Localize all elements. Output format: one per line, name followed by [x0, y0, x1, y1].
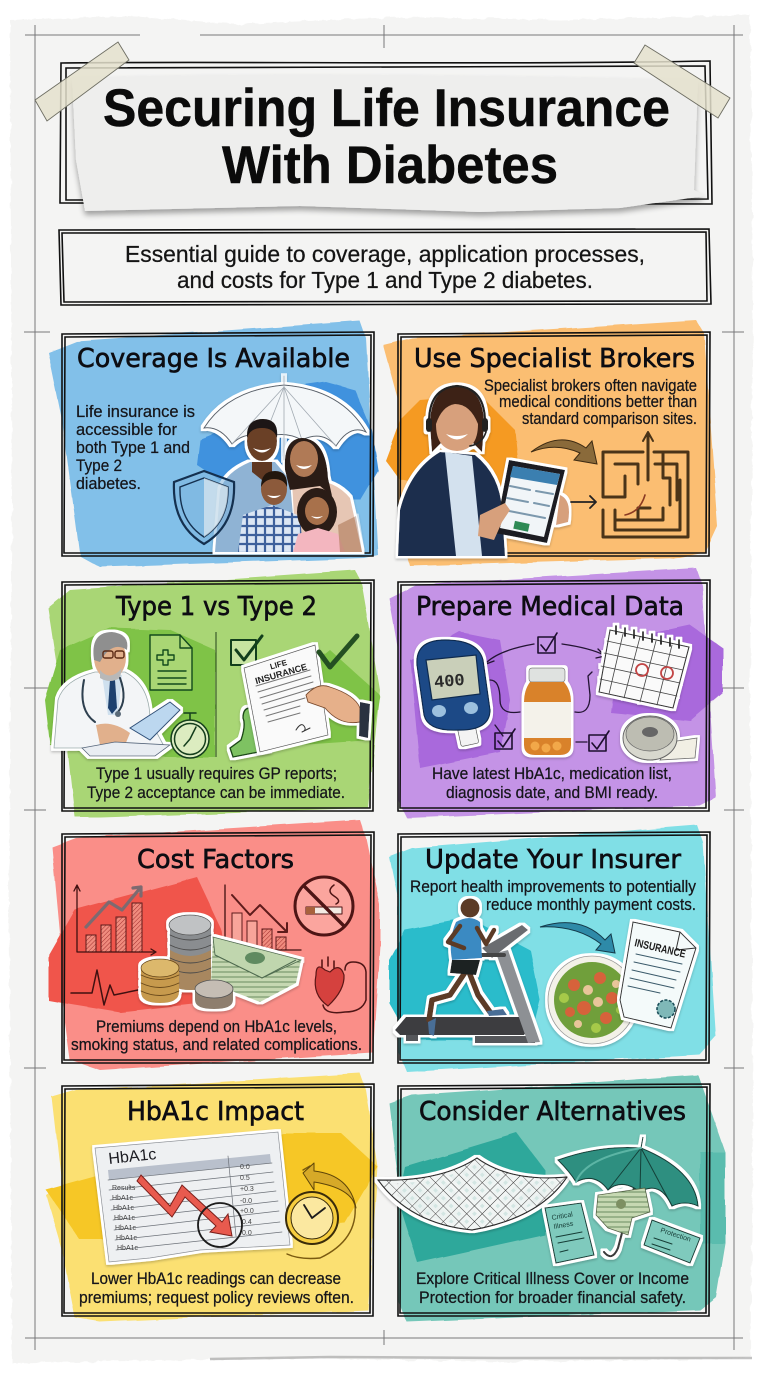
illustration: HbA1c table with falling arrow: Results [112, 1185, 136, 1192]
heading: Update Your Insurer [425, 845, 681, 875]
illustration: HbA1c table with falling arrow: +0.3 [240, 1186, 254, 1193]
panel: Type 1 vs Type 2 [45, 570, 380, 817]
illustration: safety net [378, 1158, 567, 1230]
tape right [634, 45, 730, 118]
icon: maze [571, 432, 688, 537]
body text: Type 2 [76, 456, 122, 475]
body text [87, 764, 345, 802]
body text: Have latest HbA1c, medication list, [432, 764, 672, 783]
icon: pulse line [71, 970, 138, 1005]
body text: Specialist brokers often navigate [484, 376, 697, 395]
frame [62, 580, 374, 811]
arrow: curved teal [540, 923, 615, 953]
illustration: HbA1c table with falling arrow: +0.0 [240, 1208, 254, 1215]
subtitle box: and costs for Type 1 and Type 2 diabetes. [177, 267, 593, 293]
body text: Report health improvements to potentially [410, 877, 696, 896]
icon: shield [174, 471, 234, 544]
body text: both Type 1 and [76, 438, 190, 457]
frame [398, 832, 710, 1063]
icon: stopwatch [171, 713, 209, 758]
illustration: life insurance document with hand: INSURANCE [254, 662, 308, 686]
illustration: salad [548, 956, 636, 1044]
panel: Consider Alternatives [378, 1075, 725, 1322]
arrow: curved brown [531, 440, 597, 464]
icon: critical illness document: Illness [553, 1221, 574, 1231]
body text: Life insurance is [76, 402, 195, 421]
heading: Consider Alternatives [419, 1097, 686, 1127]
body text: Protection for broader financial safety. [419, 1288, 686, 1307]
icons: check boxes [495, 633, 609, 751]
icon: big check [319, 636, 357, 667]
frame [398, 580, 710, 811]
heading: Use Specialist Brokers [414, 344, 695, 374]
illustration: runner on treadmill [395, 898, 540, 1043]
arrow: red zigzag down [137, 1175, 232, 1236]
body text: smoking status, and related complications. [71, 1035, 362, 1054]
icon: checkbox [231, 636, 262, 665]
heading: Cost Factors [137, 845, 294, 875]
frame [62, 832, 374, 1063]
body text [79, 1269, 354, 1307]
body text: Lower HbA1c readings can decrease [91, 1269, 341, 1288]
illustration: insurance document: INSURANCE [633, 937, 687, 961]
panel: Use Specialist Brokers [383, 320, 718, 566]
panel: Update Your Insurer [389, 825, 716, 1072]
heading: Coverage Is Available [77, 344, 350, 374]
heading: Prepare Medical Data [416, 592, 684, 622]
divider [215, 632, 217, 757]
illustration: HbA1c table with falling arrow: HbA1c [108, 1146, 157, 1168]
icon: clock with arrow [286, 1163, 356, 1258]
title text: With Diabetes [222, 136, 558, 195]
tape left [35, 42, 129, 121]
illustration: HbA1c table with falling arrow: HbA1c [113, 1205, 135, 1212]
body text [432, 764, 672, 802]
illustration: doctor [54, 632, 180, 756]
illustration: HbA1c table with falling arrow: HbA1c [112, 1195, 134, 1202]
illustration: family under umbrella [204, 376, 366, 552]
illustration: HbA1c table with falling arrow: 0.0 [242, 1230, 252, 1237]
heading: HbA1c Impact [127, 1097, 304, 1127]
illustration: HbA1c table with falling arrow: -0.0 [240, 1198, 252, 1205]
highlight circle [198, 1203, 242, 1247]
heading: Type 1 vs Type 2 [115, 592, 317, 622]
chart: falling bars [225, 885, 301, 950]
illustration: calendar [599, 626, 689, 708]
subtitle box [59, 229, 711, 305]
illustration: life insurance document with hand: LIFE [269, 658, 289, 671]
icon: medical document [150, 635, 192, 690]
body text: Type 2 acceptance can be immediate. [87, 783, 345, 802]
illustration: measuring tape [623, 716, 697, 760]
body text [76, 402, 195, 493]
illustration: HbA1c table with falling arrow: HbA1c [116, 1235, 138, 1242]
body text [410, 877, 696, 914]
title text: Securing Life Insurance [103, 79, 670, 138]
illustration: HbA1c table with falling arrow [95, 1132, 290, 1262]
body text [71, 1017, 362, 1054]
subtitle box: Essential guide to coverage, application processes, [125, 241, 645, 267]
illustration: broker with tablet [398, 386, 569, 556]
body text [484, 376, 697, 428]
frame [62, 1084, 374, 1316]
frame [398, 1084, 710, 1316]
icon: stamp [230, 708, 269, 757]
illustration: insurance document [620, 922, 696, 1028]
illustration: HbA1c table with falling arrow: 0.0 [240, 1164, 250, 1171]
torn title paper [72, 75, 705, 212]
illustration: glucose meter [417, 640, 490, 747]
title double frame [60, 61, 712, 204]
panel: Prepare Medical Data [389, 568, 723, 818]
frame [62, 332, 374, 556]
body text: accessible for [76, 420, 177, 439]
illustration: HbA1c table with falling arrow: HbA1c [117, 1245, 139, 1252]
icon: no smoking [295, 877, 353, 935]
illustration: HbA1c table with falling arrow: 0.4 [242, 1219, 252, 1226]
body text: Explore Critical Illness Cover or Income [416, 1269, 689, 1288]
body text: Premiums depend on HbA1c levels, [96, 1017, 337, 1036]
icon: heart and stethoscope [315, 957, 366, 1013]
body text: standard comparison sites. [522, 409, 697, 428]
body text: diabetes. [76, 474, 141, 493]
icon: protection document [644, 1220, 700, 1263]
illustration: life insurance document with hand [244, 645, 370, 752]
icon: critical illness document: Critical [551, 1211, 574, 1222]
icon: protection document: Protection [659, 1227, 692, 1244]
icon: critical illness document [545, 1203, 594, 1263]
illustration: HbA1c table with falling arrow: HbA1c [115, 1225, 137, 1232]
illustration: HbA1c table with falling arrow: HbA1c [114, 1215, 136, 1222]
icon: connector arrows [484, 644, 605, 742]
chart: rising bars [74, 885, 156, 955]
illustration: umbrella and money [558, 1137, 698, 1256]
illustration: pill bottle [524, 668, 571, 755]
body text: premiums; request policy reviews often. [79, 1288, 354, 1307]
frame [398, 332, 710, 556]
illustration: money and coins [141, 915, 301, 1009]
body text: Type 1 usually requires GP reports; [96, 764, 337, 783]
title block [35, 42, 730, 212]
panel: Cost Factors [48, 820, 380, 1070]
illustration: glucose meter: 400 [433, 672, 466, 693]
body text [416, 1269, 689, 1307]
illustration: HbA1c table with falling arrow: 0.5 [240, 1175, 250, 1182]
body text: reduce monthly payment costs. [486, 895, 696, 914]
body text: diagnosis date, and BMI ready. [446, 783, 658, 802]
body text: medical conditions better than [499, 392, 697, 411]
panel: Coverage Is Available [48, 321, 378, 567]
panel: HbA1c Impact [46, 1073, 378, 1322]
